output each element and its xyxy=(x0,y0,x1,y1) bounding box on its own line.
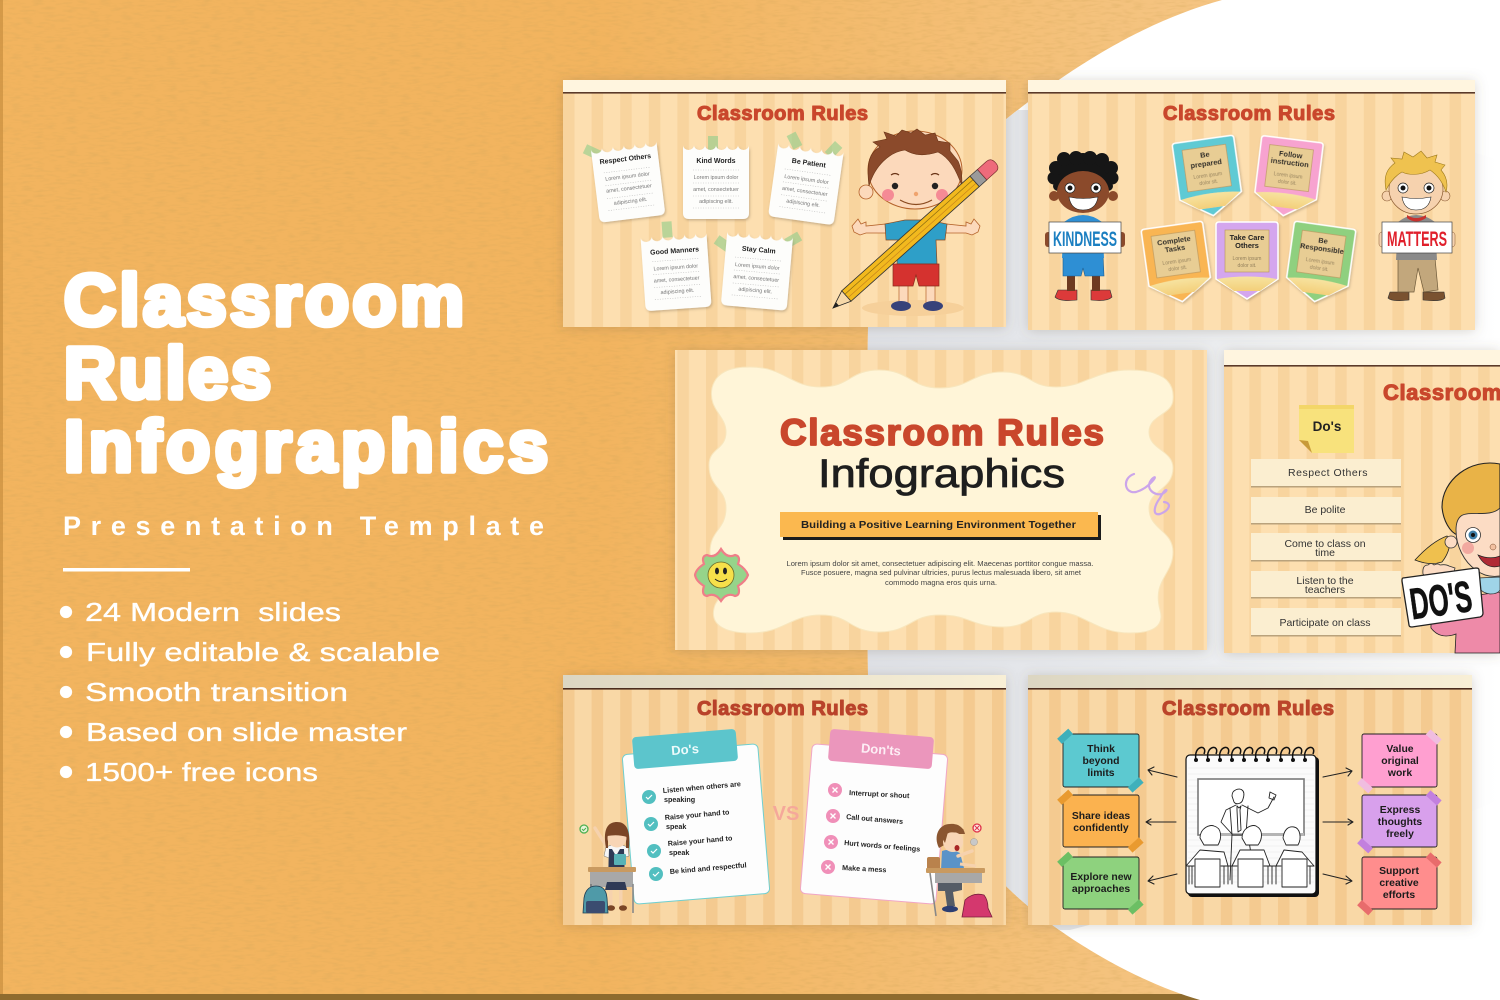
card: share ideas confidently: confidently xyxy=(1073,823,1129,834)
pencil tag: be responsible xyxy=(1284,221,1356,306)
main heading: Infographics xyxy=(64,407,548,487)
note: stay calm xyxy=(708,225,803,312)
vs label: VS xyxy=(773,803,799,825)
slide: do's list xyxy=(1224,350,1500,653)
note: stay calm: adipiscing elit. xyxy=(738,286,772,295)
slide: classroom rules notes xyxy=(563,80,1006,327)
subheading: Presentation Template xyxy=(63,511,544,541)
pencil tag: complete tasks: dolor sit. xyxy=(1168,265,1188,273)
body text: Lorem ipsum dolor sit amet, consectetuer adipiscing elit. Maecenas porttitor congue massa. xyxy=(786,559,1094,568)
illustration: girl holding do's sign xyxy=(1402,463,1500,653)
pencil tag: be prepared: Lorem ipsum xyxy=(1193,171,1223,181)
feature list: 1500+ free icons xyxy=(85,757,318,787)
main heading: Rules xyxy=(64,334,271,414)
pencil tag: be prepared: prepared xyxy=(1190,157,1223,170)
pencil tag: be responsible: Lorem ipsum xyxy=(1305,257,1335,267)
spiral binding xyxy=(1196,747,1314,760)
note: be patient: Lorem ipsum dolor xyxy=(784,174,829,186)
sticky note: do's xyxy=(1299,405,1354,453)
do's checklist: speak xyxy=(666,822,686,831)
boy holding matters sign xyxy=(1379,151,1455,301)
feature list: Fully editable & scalable xyxy=(86,637,440,667)
pencil tag: follow instruction: Follow xyxy=(1279,149,1303,161)
card: share ideas confidently xyxy=(1057,790,1144,853)
do's checklist: Raise your hand to xyxy=(664,807,730,822)
rule rows: Be polite xyxy=(1305,504,1346,516)
body text xyxy=(786,559,1094,587)
do's checklist: Raise your hand to xyxy=(667,833,733,848)
note: be patient: amet, consectetuer xyxy=(782,186,828,198)
card: support creative efforts xyxy=(1357,852,1442,915)
do's checklist: speak xyxy=(669,848,689,857)
note: kind words: Lorem ipsum dolor xyxy=(694,175,739,181)
don'ts checklist: Call out answers xyxy=(846,812,904,826)
decoration: lilac squiggle xyxy=(1126,474,1169,514)
note: good manners: Good Manners xyxy=(650,246,699,257)
do's card header xyxy=(632,729,738,769)
do's checklist: speaking xyxy=(664,795,695,804)
slide: do's and don'ts xyxy=(563,675,1006,925)
note: stay calm: amet, consectetuer xyxy=(733,274,780,284)
card: express thoughts freely: freely xyxy=(1386,829,1414,840)
card: support creative efforts: Support xyxy=(1379,866,1419,877)
note: stay calm: Lorem ipsum dolor xyxy=(735,262,780,272)
don'ts card header xyxy=(828,729,934,769)
pencil tag: be responsible: dolor sit. xyxy=(1309,265,1329,273)
note: be patient xyxy=(768,129,846,225)
note: be patient: adipiscing elit. xyxy=(786,198,820,209)
card: think beyond limits: limits xyxy=(1087,768,1115,779)
pencil tag: follow instruction xyxy=(1252,136,1323,219)
arrows xyxy=(1146,767,1353,884)
card: express thoughts freely xyxy=(1357,790,1442,853)
card: explore new approaches xyxy=(1057,852,1144,915)
icon: red backpack xyxy=(962,894,992,917)
card: value original work xyxy=(1357,729,1442,793)
note: respect others: amet, consectetuer xyxy=(606,183,652,195)
card: think beyond limits xyxy=(1057,729,1144,793)
slide title: Classroom Rules xyxy=(697,103,868,125)
card: think beyond limits: beyond xyxy=(1083,756,1119,767)
note: respect others: Respect Others xyxy=(599,153,652,166)
card: support creative efforts: efforts xyxy=(1383,890,1415,901)
teacher sketch xyxy=(1221,789,1276,880)
slide title: Classroom Rules xyxy=(1162,698,1334,720)
card: value original work: Value xyxy=(1386,744,1414,755)
don'ts checklist xyxy=(821,783,921,874)
pencil tag: take care others: Lorem ipsum xyxy=(1233,256,1261,262)
pencil tag: be prepared: Be xyxy=(1200,150,1210,160)
pencil tag: be prepared: dolor sit. xyxy=(1199,179,1219,187)
pencil tag: complete tasks xyxy=(1141,221,1213,306)
note: good manners: Lorem ipsum dolor xyxy=(653,263,698,273)
main title: infographics: Infographics xyxy=(818,452,1065,496)
slide: creative classroom xyxy=(1028,675,1472,925)
rule rows: Come to class on xyxy=(1284,538,1366,550)
pencil tag: take care others: dolor sit. xyxy=(1238,263,1256,269)
note: good manners xyxy=(640,219,712,311)
note: respect others: adipiscing elit. xyxy=(613,197,648,207)
feature list: 24 Modern slides xyxy=(85,597,341,627)
don'ts card header: Don'ts xyxy=(860,740,901,759)
main heading: Classroom xyxy=(64,261,464,341)
feature list: Based on slide master xyxy=(86,717,407,747)
pencil tag: take care others: Others xyxy=(1235,241,1259,250)
pencil tag: take care others xyxy=(1216,222,1278,299)
slide: pencil tags xyxy=(1028,80,1475,330)
don'ts checklist: Interrupt or shout xyxy=(849,788,910,800)
rule rows: teachers xyxy=(1305,584,1345,596)
note: be patient: Be Patient xyxy=(791,158,827,170)
card: express thoughts freely: thoughts xyxy=(1378,817,1422,828)
pencil tag: complete tasks: Lorem ipsum xyxy=(1162,257,1192,267)
don'ts checklist: Make a mess xyxy=(842,863,887,874)
card: value original work: original xyxy=(1381,756,1419,767)
panel: do's card xyxy=(622,744,770,904)
body text: commodo magna eros quis urna. xyxy=(885,578,997,587)
slide: main title card xyxy=(675,350,1207,650)
pencil tag: follow instruction: instruction xyxy=(1270,156,1310,169)
pencil tag: be responsible: Responsible xyxy=(1300,241,1344,256)
note: respect others xyxy=(582,136,665,224)
pencil tag: be responsible: Be xyxy=(1318,236,1328,246)
panel: don'ts card xyxy=(800,744,948,904)
body text: Fusce posuere, magna sed pulvinar ultricies, purus lectus malesuada libero, sit amet xyxy=(801,568,1081,577)
card: explore new approaches: Explore new xyxy=(1070,872,1133,883)
rule rows: time xyxy=(1315,547,1335,559)
pencil tag: complete tasks: Complete xyxy=(1157,234,1191,248)
main title: classroom rules: Classroom Rules xyxy=(780,412,1104,453)
rule rows: Participate on class xyxy=(1279,617,1371,629)
sign text: KINDNESS xyxy=(1053,228,1117,251)
subtitle banner xyxy=(780,512,1101,540)
students sketch xyxy=(1186,826,1314,887)
icon: backpack xyxy=(583,886,608,913)
note: kind words: amet, consectetuer xyxy=(693,187,739,193)
do's card header: Do's xyxy=(671,741,699,758)
boy holding kindness sign xyxy=(1045,151,1125,301)
card: express thoughts freely: Express xyxy=(1380,805,1420,816)
note: kind words: Kind Words xyxy=(696,158,736,165)
feature list xyxy=(60,597,440,787)
don'ts checklist: Hurt words or feelings xyxy=(844,838,921,854)
do's checklist xyxy=(642,779,747,881)
note: respect others: Lorem ipsum dolor xyxy=(605,171,650,183)
note: good manners: amet, consectetuer xyxy=(654,275,700,285)
slide title: Classroom Rules xyxy=(1163,103,1335,125)
card: think beyond limits: Think xyxy=(1087,744,1115,755)
pencil tag: be prepared xyxy=(1172,135,1244,220)
sign text: MATTERS xyxy=(1387,228,1447,251)
divider rule xyxy=(63,568,190,572)
card: share ideas confidently: Share ideas xyxy=(1072,811,1130,822)
wavy cream panel xyxy=(709,367,1173,633)
illustration: boy at desk xyxy=(926,824,992,917)
note: kind words xyxy=(683,136,749,219)
pencil tag: follow instruction: Lorem ipsum xyxy=(1273,171,1303,181)
pencil tag: complete tasks: Tasks xyxy=(1164,243,1186,255)
subtitle banner: Building a Positive Learning Environment Together xyxy=(801,519,1076,531)
pencil tag: follow instruction: dolor sit. xyxy=(1278,179,1297,187)
pencil tag: take care others: Take Care xyxy=(1230,233,1264,242)
rule rows: Listen to the xyxy=(1296,575,1354,587)
illustration: boy with pencil xyxy=(828,129,1000,316)
card: value original work: work xyxy=(1387,768,1412,779)
rule rows xyxy=(1251,459,1401,636)
do's checklist: Be kind and respectful xyxy=(669,860,747,876)
blackboard xyxy=(1198,779,1304,836)
illustration: girl at desk xyxy=(580,822,636,913)
notebook illustration xyxy=(1186,747,1319,897)
main heading xyxy=(64,261,548,487)
card: explore new approaches: approaches xyxy=(1072,884,1130,895)
note: stay calm: Stay Calm xyxy=(742,246,776,256)
rule rows: Respect Others xyxy=(1288,467,1368,479)
note: good manners: adipiscing elit. xyxy=(660,288,695,296)
do's checklist: Listen when others are xyxy=(662,779,741,795)
icon: smiling flower sticker xyxy=(695,549,748,601)
note: kind words: adipiscing elit. xyxy=(699,199,733,205)
sticky note: do's: Do's xyxy=(1313,419,1341,434)
feature list: Smooth transition xyxy=(85,677,348,707)
white curved background shape xyxy=(868,0,1500,1000)
icon: pencil xyxy=(828,157,1000,313)
slide title: Classroom Rules xyxy=(697,698,868,720)
card: support creative efforts: creative xyxy=(1379,878,1419,889)
